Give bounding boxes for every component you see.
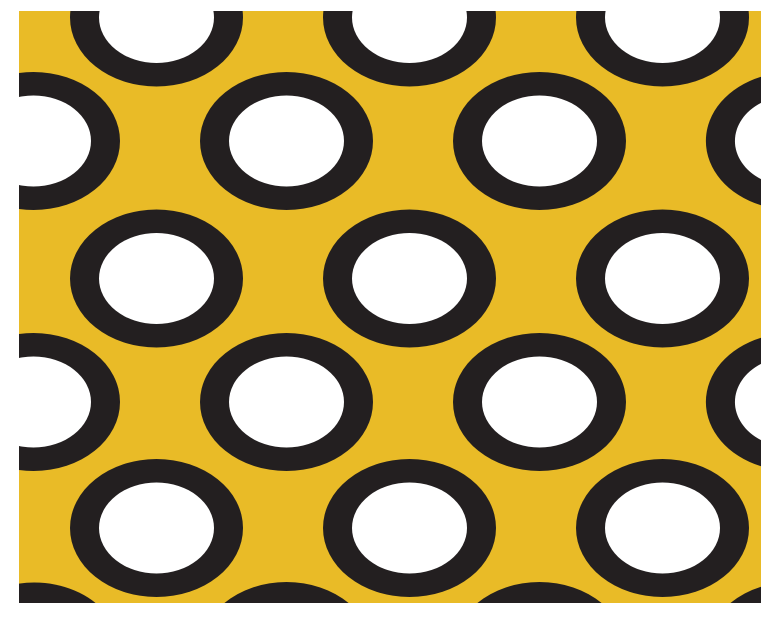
ring row 2 — [0, 72, 761, 210]
ring row 6 (cut by bottom edge) — [19, 582, 761, 603]
ring row 5 — [70, 459, 749, 597]
ring row 4 — [0, 333, 761, 471]
ring row 1 — [70, 11, 749, 86]
ring row 3 — [70, 210, 749, 348]
